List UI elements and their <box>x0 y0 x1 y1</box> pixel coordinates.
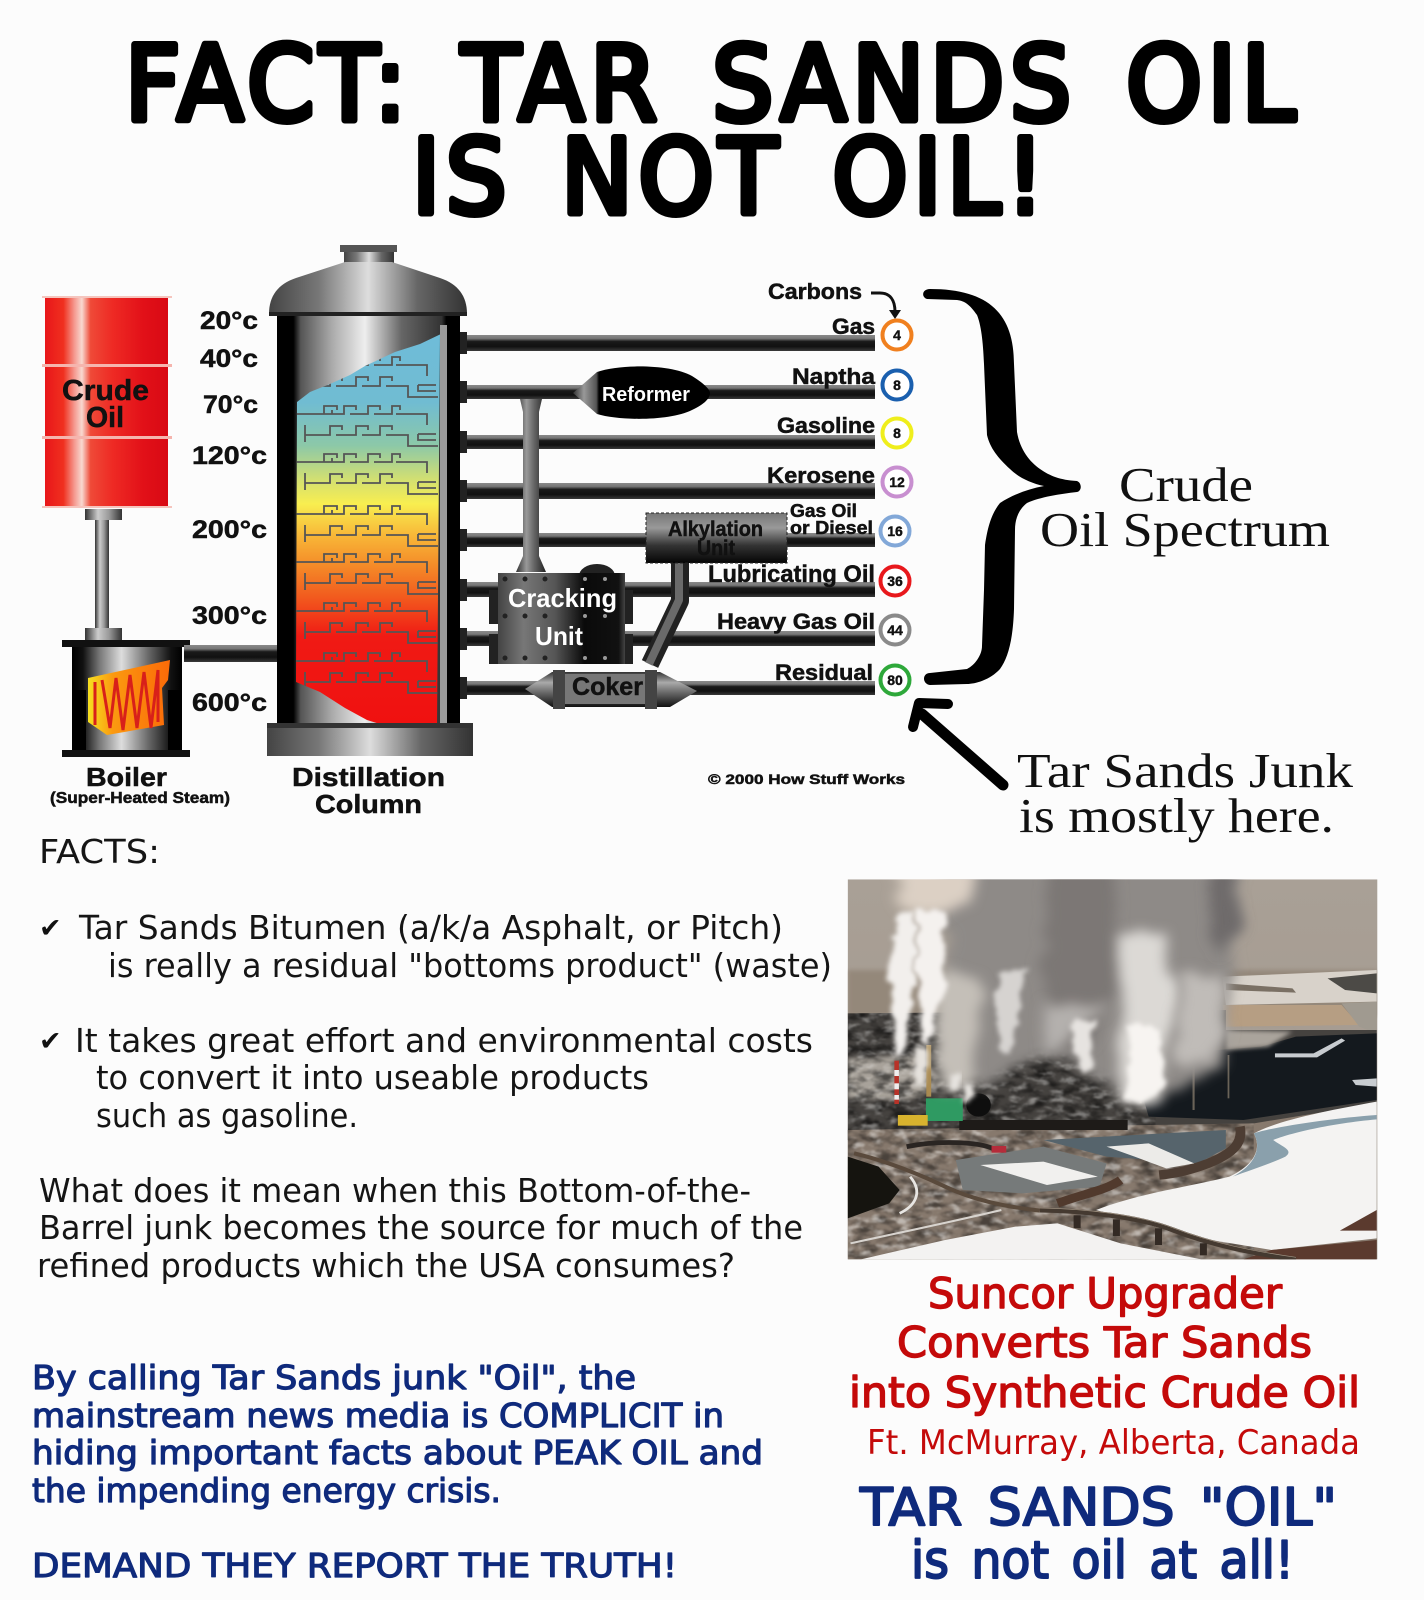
temperature labels: 600°c <box>192 689 267 717</box>
title: FACT: TAR SANDS OIL <box>125 25 1301 145</box>
crude oil spectrum label <box>1040 457 1330 557</box>
distillation diagram <box>42 245 912 819</box>
blue statement: DEMAND THEY REPORT THE TRUTH! <box>32 1546 677 1585</box>
product labels: Gasoline <box>777 413 875 438</box>
crude oil drum: Oil <box>86 402 124 434</box>
frozen river and snow <box>848 1102 1377 1259</box>
closing statement <box>859 1478 1337 1591</box>
fact one: ✔ <box>39 913 62 944</box>
photo caption: Suncor Upgrader <box>928 1269 1283 1318</box>
cracking unit: Unit <box>535 621 583 651</box>
smoke plumes <box>889 857 1240 1103</box>
carbons arrow <box>871 293 901 319</box>
alkylation unit: Unit <box>697 537 735 560</box>
diagram captions: Distillation <box>292 762 445 792</box>
connector pipe <box>649 560 680 664</box>
fact one <box>39 908 832 985</box>
arrow to residual <box>913 703 1003 785</box>
lower ground <box>848 1103 1377 1259</box>
crude oil spectrum label: Oil Spectrum <box>1040 502 1330 557</box>
temperature labels: 200°c <box>192 516 267 544</box>
closing statement: TAR SANDS "OIL" <box>859 1478 1337 1538</box>
blue statement: the impending energy crisis. <box>32 1471 501 1510</box>
carbon count circles: 12 <box>889 474 905 490</box>
boiler <box>62 640 288 757</box>
product labels <box>708 279 876 685</box>
diagram captions: © 2000 How Stuff Works <box>708 771 905 787</box>
crude oil drum <box>42 296 172 508</box>
tar sands junk label <box>1017 743 1354 843</box>
product labels: or Diesel <box>790 518 873 538</box>
cracking unit: Cracking <box>508 583 617 613</box>
alkylation unit: Alkylation <box>668 518 763 541</box>
settling basins <box>907 1130 1226 1193</box>
coker <box>525 670 697 709</box>
temperature labels: 120°c <box>192 442 267 470</box>
tar sands junk label: Tar Sands Junk <box>1017 743 1354 798</box>
crude oil drum: Crude <box>62 375 149 407</box>
curly brace <box>923 289 1081 685</box>
product labels: Residual <box>775 660 873 685</box>
temperature labels: 40°c <box>200 345 258 373</box>
photo caption: into Synthetic Crude Oil <box>849 1368 1360 1417</box>
photo: Suncor upgrader <box>848 857 1377 1259</box>
blue statement: mainstream news media is COMPLICIT in <box>32 1396 724 1435</box>
question: What does it mean when this Bottom-of-the- <box>39 1171 751 1210</box>
reformer <box>573 366 710 419</box>
carbon count circles: 80 <box>887 672 903 688</box>
product labels: Gas Oil <box>790 501 857 521</box>
fact two: to convert it into useable products <box>96 1058 649 1097</box>
temperature labels: 300°c <box>192 602 267 630</box>
diagram captions: (Super-Heated Steam) <box>50 790 230 807</box>
temperature labels: 70°c <box>203 391 258 419</box>
carbon count circles: 8 <box>893 377 901 393</box>
question: refined products which the USA consumes? <box>37 1246 735 1285</box>
fact one: is really a residual "bottoms product" (waste) <box>108 946 832 985</box>
product labels: Kerosene <box>767 463 875 488</box>
product labels: Heavy Gas Oil <box>717 609 875 634</box>
bridge piers <box>1074 1215 1207 1255</box>
blue statement: hiding important facts about PEAK OIL and <box>32 1433 763 1472</box>
photo caption: Converts Tar Sands <box>897 1318 1312 1367</box>
cracking unit <box>489 564 633 664</box>
title: IS NOT OIL! <box>412 118 1050 238</box>
question: Barrel junk becomes the source for much of the <box>39 1208 803 1247</box>
carbon count circles: 16 <box>887 523 903 539</box>
carbon count circles: 36 <box>887 573 903 589</box>
photo caption: Ft. McMurray, Alberta, Canada <box>867 1423 1360 1463</box>
fact two <box>39 1021 813 1135</box>
temperature labels: 20°c <box>200 307 258 335</box>
blue statement: By calling Tar Sands junk "Oil", the <box>32 1358 636 1397</box>
coker: Coker <box>572 673 643 701</box>
horizon land <box>848 970 1377 1033</box>
temperature labels <box>192 307 267 717</box>
carbon count circles: 4 <box>893 327 901 343</box>
tar sands junk label: is mostly here. <box>1019 788 1334 843</box>
roads and bridge <box>851 1127 1296 1259</box>
diagram captions: Column <box>315 789 422 819</box>
closing statement: is not oil at all! <box>911 1531 1294 1591</box>
diagram captions <box>50 762 905 819</box>
fact two: It takes great effort and environmental costs <box>75 1021 813 1060</box>
carbon count circles: 8 <box>893 425 901 441</box>
reformer: Reformer <box>602 384 690 406</box>
fact one: Tar Sands Bitumen (a/k/a Asphalt, or Pitch) <box>78 908 783 947</box>
fact two: such as gasoline. <box>96 1096 358 1135</box>
output pipes <box>460 332 875 699</box>
diagram captions: Boiler <box>86 762 167 792</box>
blue statement <box>32 1358 763 1585</box>
product labels: Lubricating Oil <box>708 561 875 588</box>
carbon count circles <box>880 320 912 694</box>
plant structures <box>894 1045 1229 1153</box>
question <box>37 1171 803 1285</box>
product labels: Gas <box>832 314 875 339</box>
facts text block <box>37 832 832 1285</box>
fact two: ✔ <box>39 1026 62 1057</box>
photo caption <box>849 1269 1360 1463</box>
feed pipe <box>85 509 122 640</box>
product labels: Carbons <box>768 279 862 304</box>
carbon count circles: 44 <box>887 622 903 638</box>
distillation column <box>267 245 473 756</box>
dark land <box>848 1010 1377 1140</box>
product labels: Naptha <box>792 364 876 389</box>
crude oil spectrum label: Crude <box>1119 457 1253 512</box>
facts text block: FACTS: <box>39 832 160 871</box>
alkylation unit <box>646 513 787 563</box>
title <box>125 25 1301 238</box>
vertical pipe to cracking unit <box>516 399 546 572</box>
